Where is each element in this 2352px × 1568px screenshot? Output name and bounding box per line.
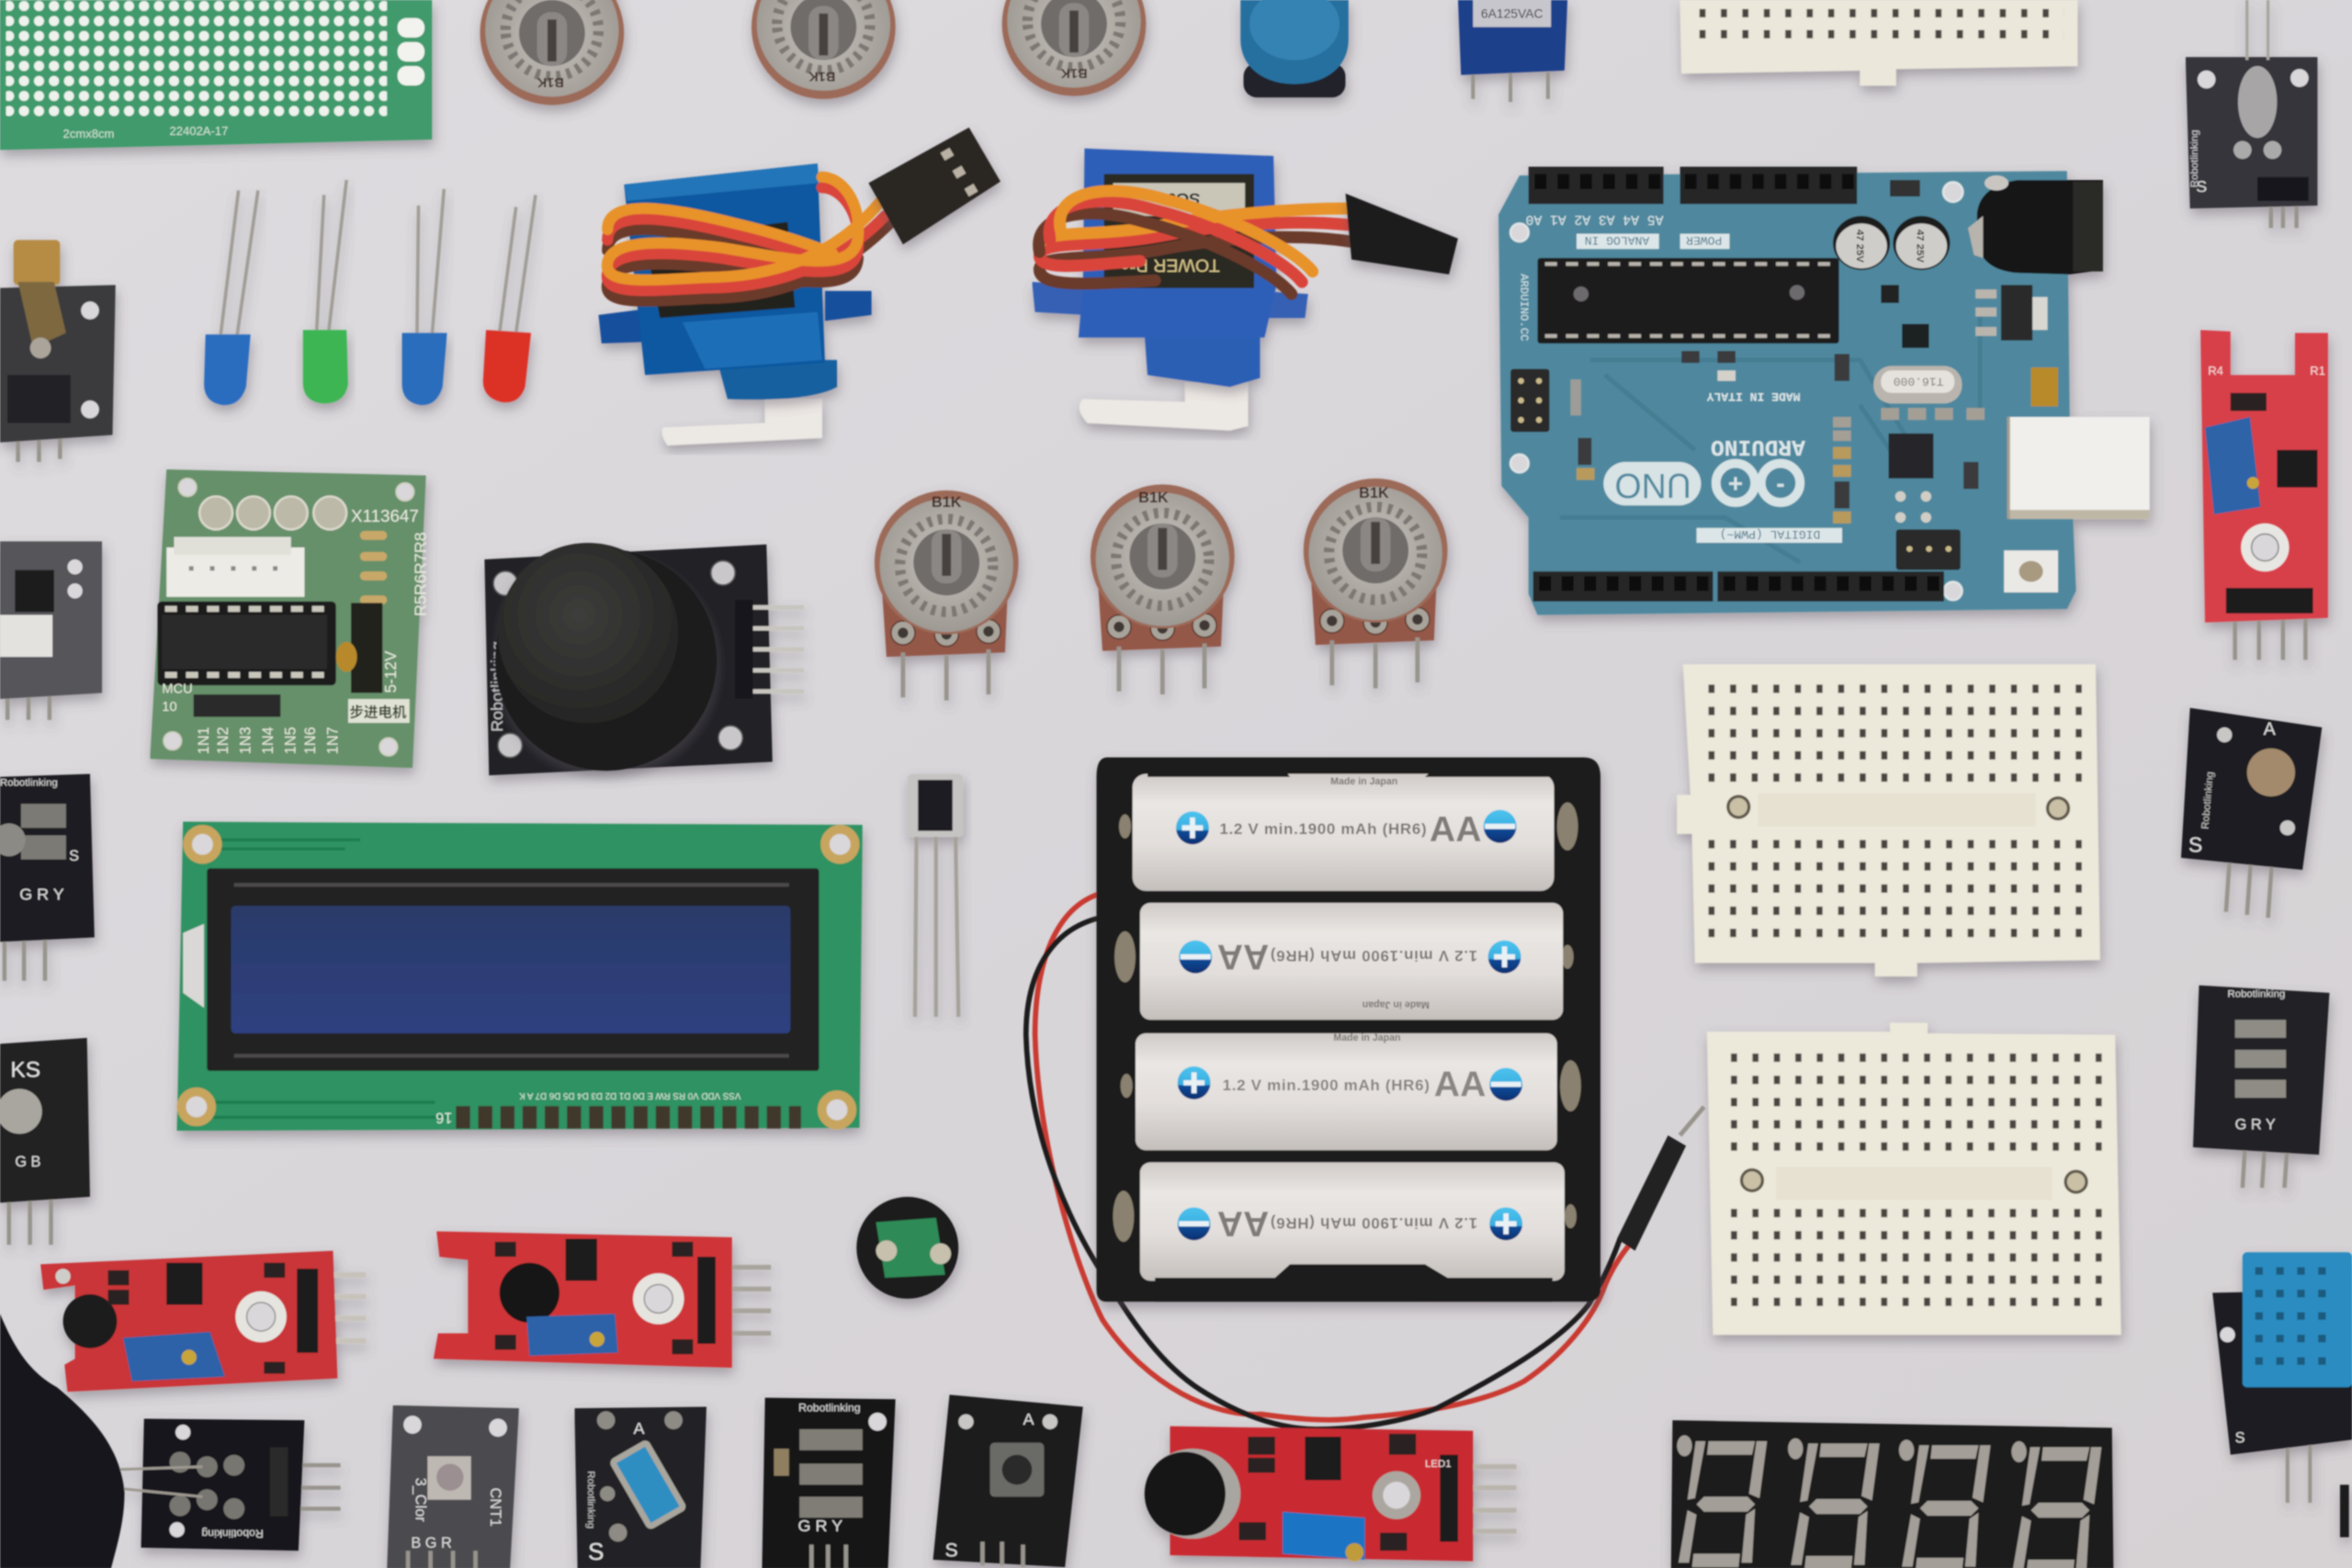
battery 1 (1133, 758, 1560, 891)
bottom pin headers (1533, 571, 1944, 602)
board silkscreen labels: A5 A4 A3 A2 A1 A0 (1526, 211, 1663, 226)
top potentiometer 2 (752, 0, 896, 99)
battery 2: AA (1217, 937, 1269, 976)
black glove, bottom left (0, 1314, 125, 1568)
photoresistor module, right side: A (2264, 719, 2277, 739)
LED red (483, 195, 536, 402)
silkscreen labels: 1N1 (196, 727, 212, 754)
green perfboard: 22402A-17 (169, 124, 228, 138)
potentiometer centre 3 (1304, 479, 1448, 688)
spring contacts (1113, 803, 1581, 1242)
ULN chip in socket (157, 602, 336, 685)
battery 1: Made in Japan (1330, 776, 1397, 787)
reset button (2004, 550, 2058, 592)
red sensor module, right side: R4 (2208, 364, 2223, 378)
UNO logo: + (1728, 469, 1743, 498)
board silkscreen labels: DIGITAL (PWM~) (1720, 527, 1820, 541)
USB connector (2008, 417, 2150, 519)
servo motor left (598, 128, 1001, 446)
board silkscreen labels: MADE IN ITALY (1707, 389, 1800, 403)
tilt switch module: A (634, 1419, 645, 1438)
LCD screen (231, 906, 790, 1033)
battery 3: Made in Japan (1333, 1032, 1401, 1043)
servo left connector (868, 128, 1001, 244)
battery 3: 1.2 V min.1900 mAh (HR6) (1223, 1077, 1430, 1094)
potentiometer centre 3: B1K (1359, 485, 1389, 502)
servo right body (1032, 149, 1308, 387)
servo right body: TOWER Pro (1120, 254, 1220, 275)
holder wires (1026, 894, 1632, 1429)
DC power jack (1968, 175, 2103, 275)
transistor module, right side: Robotlinking (2227, 989, 2285, 1000)
Robotlinking GRY module: G R Y (798, 1517, 842, 1535)
LED green (303, 180, 348, 403)
sensor module, left edge 3: S (69, 848, 79, 864)
electrolytic capacitors: 47 25V (1854, 230, 1865, 263)
top potentiometer 2: B1K (808, 68, 835, 83)
UNO logo: - (1776, 469, 1785, 498)
battery 1: 1.2 V min.1900 mAh (HR6) (1219, 820, 1427, 838)
battery 2: Made in Japan (1363, 999, 1430, 1010)
IR receiver (908, 773, 963, 1017)
red sound sensor module, left (40, 1251, 366, 1392)
electrolytic capacitors (1833, 216, 1950, 270)
silkscreen labels: 步进电机 (349, 703, 407, 720)
Robotlinking GRY module: Robotlinking (798, 1401, 861, 1414)
grey RGB LED module: B G R (411, 1535, 452, 1551)
potentiometer centre 2: B1K (1138, 490, 1169, 506)
photoresistor module, right side: Robotlinking (2199, 772, 2216, 829)
joystick board (484, 545, 804, 775)
photoresistor module, right side: S (2188, 832, 2202, 856)
wire connector (1617, 1107, 1704, 1251)
servo left wires (607, 177, 889, 301)
red sensor module, right side (2200, 330, 2328, 660)
servo left body (598, 164, 872, 400)
potentiometer centre 2 (1091, 484, 1235, 694)
sensor module, left edge 2 (0, 541, 102, 720)
green perfboard (0, 0, 432, 150)
tilt switch module: S (588, 1538, 604, 1565)
top potentiometer 1: B1K (537, 74, 564, 89)
pin row: 16 (435, 1109, 452, 1125)
top potentiometer 3: B1K (1060, 65, 1088, 80)
silkscreen labels: 1N7 (324, 727, 341, 754)
grey RGB LED module (387, 1405, 519, 1568)
battery 3: AA (1434, 1065, 1486, 1104)
stepper driver board (150, 469, 430, 768)
top pin headers (1529, 166, 1857, 204)
servo left horn (662, 399, 822, 446)
pin row: VSS VDD V0 RS RW E D0 D1 D2 D3 D4 D5 D6 D7 A K (519, 1090, 741, 1100)
silkscreen labels: 1N2 (215, 727, 232, 754)
servo right body: SG90 (1158, 190, 1200, 209)
four indicator LEDs (199, 496, 346, 529)
potentiometer centre 1: B1K (932, 494, 962, 511)
LCD bezel (207, 868, 819, 1071)
board silkscreen labels: ARDUINO.CC (1518, 274, 1531, 341)
grey RGB LED module: CNT1 (487, 1488, 503, 1527)
buzzer (856, 1197, 958, 1299)
photoresistor module, right side (2181, 708, 2322, 918)
KS sensor module, left edge 4 (0, 1038, 90, 1245)
servo right connector (1345, 194, 1458, 275)
blue switch component: 6A125VAC (1481, 6, 1543, 21)
board silkscreen labels: POWER (1686, 233, 1722, 247)
sensor module, left edge 3: Robotlinking (0, 778, 58, 789)
silkscreen labels: 10 (162, 700, 177, 715)
red microphone module, bottom: LED1 (1425, 1459, 1452, 1470)
black module with leads, bottom (112, 1419, 341, 1551)
laser module, left edge (0, 240, 116, 462)
joystick board: Robotlinking (488, 641, 506, 732)
sensor module with clear LED, top right: Robotlinking (2189, 130, 2200, 187)
silkscreen labels (162, 506, 430, 754)
blue push button (1240, 0, 1349, 97)
silkscreen labels: 5-12V (381, 650, 400, 693)
top potentiometer 3 (1002, 0, 1146, 96)
header (194, 694, 280, 716)
KS sensor module, left edge 4: G B (15, 1154, 41, 1170)
transistor module, right side (2193, 986, 2330, 1188)
DHT humidity sensor module (2212, 1252, 2352, 1538)
KS sensor module, left edge 4: KS (10, 1057, 40, 1082)
jumper and capacitor (336, 603, 382, 693)
battery 3 (1136, 1032, 1557, 1150)
board mounting holes (1510, 182, 1962, 600)
joystick module (484, 543, 804, 775)
push button module: S (945, 1540, 958, 1562)
LCD display (177, 822, 863, 1131)
silkscreen labels: 1N4 (260, 727, 277, 754)
potentiometer centre 1 (875, 491, 1019, 700)
servo right horn (1080, 382, 1248, 431)
joystick knob (495, 543, 717, 771)
servo motor right (1032, 149, 1458, 431)
tilt switch module (574, 1406, 707, 1568)
small chips, fuse and surface-mount parts (1570, 180, 2058, 524)
UNO logo (1603, 462, 1800, 505)
silkscreen labels: R5R6R7R8 (412, 532, 430, 616)
LED blue 2 (402, 189, 447, 405)
red microphone module, bottom (1145, 1427, 1517, 1562)
silkscreen labels: 1N6 (302, 727, 319, 754)
top potentiometer 1 (480, 0, 624, 105)
white motor socket (166, 537, 304, 597)
servo right wires (1039, 191, 1350, 294)
battery 4 (1140, 1162, 1565, 1302)
battery holder and four AA cells (1026, 758, 1704, 1429)
silkscreen labels: MCU (162, 682, 193, 696)
grey RGB LED module: 3_Clor (412, 1478, 428, 1522)
top breadboard (1680, 0, 2077, 85)
crystal oscillator (1873, 366, 1962, 403)
transistor module, right side: G R Y (2235, 1116, 2276, 1133)
voltage regulator (1975, 285, 2048, 341)
four digit seven-segment display (1671, 1420, 2113, 1568)
mounting rings (182, 829, 855, 1125)
LED blue 1 (204, 190, 258, 405)
tilt switch module: Robotlinking (585, 1471, 596, 1529)
red flame sensor module (434, 1231, 771, 1368)
sensor module with clear LED, top right (2186, 0, 2317, 228)
holder body (1096, 758, 1600, 1302)
battery 2: 1.2 V min.1900 mAh (HR6) (1271, 947, 1477, 964)
crystal oscillator: T16.000 (1894, 374, 1944, 388)
battery 1: AA (1430, 810, 1481, 850)
breadboard middle (1677, 664, 2100, 976)
board silkscreen labels: ANALOG IN (1585, 233, 1649, 247)
pin row (435, 1090, 801, 1125)
UNO logo: UNO (1614, 467, 1691, 505)
red sensor module, right side: R1 (2310, 364, 2325, 378)
board silkscreen labels: ARDUINO (1711, 434, 1805, 458)
Arduino UNO board (1498, 166, 2150, 615)
Robotlinking GRY module (762, 1398, 896, 1568)
push button module (933, 1394, 1083, 1567)
breadboard lower (1707, 1023, 2121, 1335)
electrolytic capacitors: 47 25V (1915, 230, 1926, 263)
ICSP headers (1510, 369, 1961, 570)
battery 4: 1.2 V min.1900 mAh (HR6) (1271, 1214, 1477, 1232)
DHT humidity sensor module: S (2235, 1430, 2245, 1447)
green perfboard: 2cmx8cm (63, 127, 115, 141)
black module with leads, bottom: Robotlinking (201, 1527, 264, 1540)
side tab (183, 924, 204, 1008)
ATmega chip (1537, 258, 1839, 344)
silkscreen labels: 1N3 (238, 727, 254, 754)
sensor module, left edge 3 (0, 773, 95, 981)
sensor module, left edge 3: G R Y (19, 886, 64, 904)
blue switch component (1458, 0, 1567, 102)
battery 4: AA (1217, 1203, 1269, 1243)
battery 2 (1140, 903, 1563, 1020)
silkscreen labels: 1N5 (283, 727, 300, 754)
board silkscreen labels (1518, 211, 1842, 543)
silkscreen labels: X113647 (351, 506, 419, 525)
sensor module with clear LED, top right: S (2196, 177, 2207, 196)
push button module: A (1023, 1410, 1034, 1428)
resistors (360, 531, 387, 604)
